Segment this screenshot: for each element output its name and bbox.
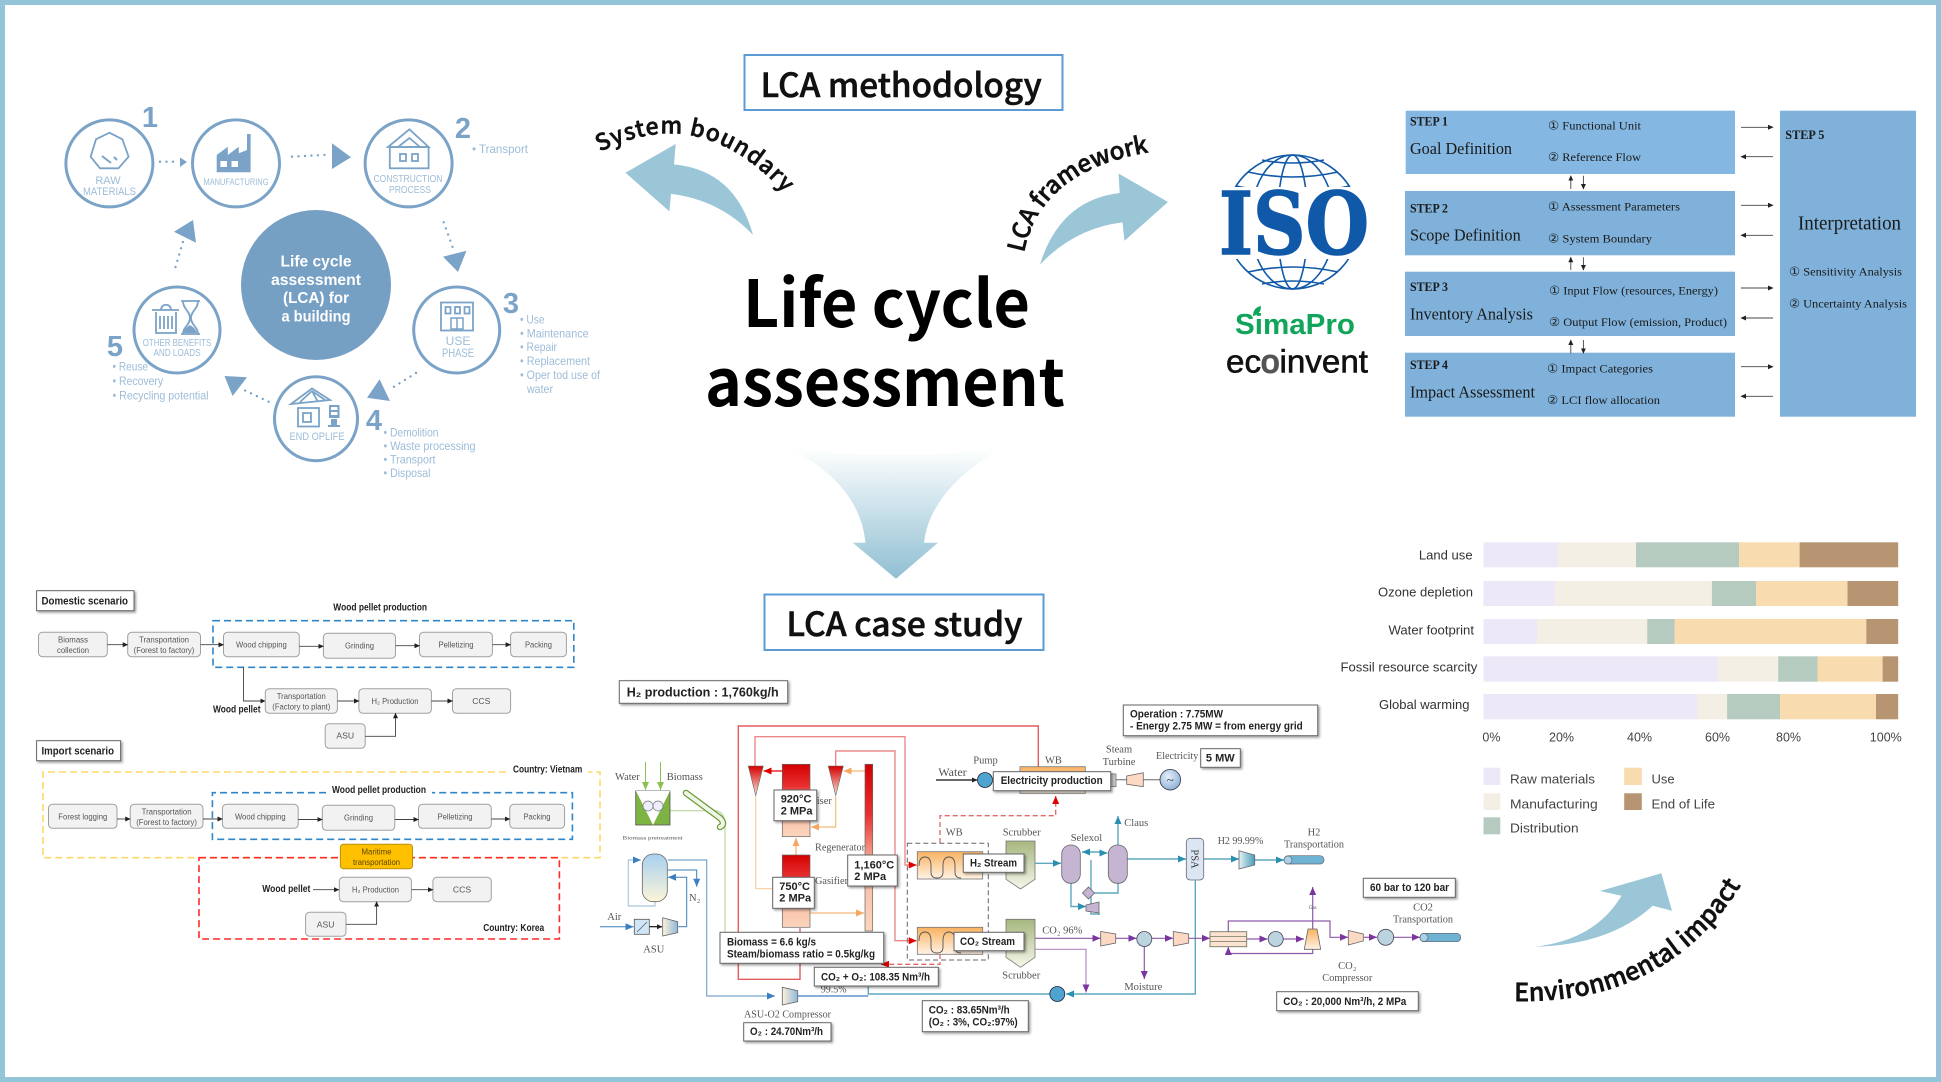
- domestic wood pellet production: [38, 603, 574, 667]
- callout: 1160 C: 1,160°C: [854, 859, 894, 871]
- import wood pellet production: Transportation: [142, 806, 192, 816]
- label: environmental impact: Environmental impact: [1516, 878, 1741, 1002]
- carbon dioxide compression line: Transportation: [1393, 915, 1454, 926]
- callout: CO2 flow: (O₂ : 3%, CO₂:97%): [929, 1017, 1018, 1029]
- step 1 goal definition: Goal Definition: [1410, 139, 1512, 158]
- red steam loops: [738, 726, 1038, 979]
- arrow: other benefits to raw materials: [174, 220, 196, 267]
- number 4 and notes: • Waste processing: [384, 439, 476, 453]
- icon: ISO globe and wordmark: ISO: [1219, 174, 1369, 275]
- step 5 interpretation: [1780, 111, 1916, 417]
- step 2 scope definition: ① Assessment Parameters: [1548, 200, 1680, 214]
- x axis ticks: 80%: [1776, 731, 1801, 745]
- carbon dioxide compression line: [1035, 887, 1461, 993]
- ecoinvent logo: ecoinvent: [1226, 344, 1368, 380]
- oxygen recycle line: [744, 880, 1195, 1021]
- domestic wood pellet production: Wood chipping: [236, 640, 287, 650]
- country Korea region: CCS: [453, 885, 471, 895]
- label: domestic scenario: Domestic scenario: [42, 595, 128, 607]
- callout: CO2 + O2: [814, 967, 938, 986]
- step 4 impact assessment: Impact Assessment: [1410, 382, 1535, 401]
- callout: 1160 C: 2 MPa: [854, 871, 887, 883]
- step 2 scope definition: Scope Definition: [1410, 226, 1521, 245]
- row: land use: [1419, 542, 1898, 567]
- biomass pretreatment: Biomass pretreatment: [623, 835, 683, 841]
- panel: scenario flow diagrams: [37, 591, 600, 939]
- arrow: raw materials to manufacturing: [160, 158, 187, 167]
- title: Life cycle assessment: [705, 252, 1065, 425]
- domestic hydrogen production chain: (Factory to plant): [272, 702, 330, 712]
- callout: 1160 C: [848, 855, 897, 886]
- country Korea region: Wood pellet: [262, 884, 311, 895]
- domestic wood pellet production: Packing: [525, 640, 552, 650]
- callout: operation power: - Energy 2.75 MW = from energy grid: [1130, 720, 1303, 732]
- step 1 goal definition: ① Functional Unit: [1548, 118, 1642, 132]
- hydrogen purification line: [1035, 816, 1345, 914]
- stage: raw materials: MATERIALS: [83, 186, 136, 198]
- electricity generation train: ~: [1167, 772, 1174, 787]
- heat exchangers and scrubbers: WB: [946, 828, 963, 839]
- legend: Raw materials: [1510, 771, 1596, 786]
- title: Life cycle assessment: Life cycle: [743, 252, 1030, 346]
- stage: use phase: [414, 287, 500, 373]
- panel: building life cycle diagram: [66, 102, 601, 480]
- row: ozone depletion: [1378, 581, 1898, 606]
- row: ozone depletion: Ozone depletion: [1378, 585, 1473, 600]
- number 1: 1: [142, 102, 158, 134]
- arrow: to environmental impact: [1535, 873, 1672, 947]
- arrow: use to end of life: [367, 373, 416, 401]
- row: land use: Land use: [1419, 547, 1473, 562]
- stage: construction process: PROCESS: [389, 185, 431, 196]
- title: Life cycle assessment: assessment: [705, 331, 1065, 425]
- centre circle: life cycle assessment for a building: Life cycle: [280, 254, 352, 270]
- domestic wood pellet production: Transportation: [139, 634, 189, 644]
- import wood pellet production: Forest logging: [58, 811, 107, 821]
- air separation unit: [600, 854, 775, 996]
- callout: electricity production: [993, 772, 1111, 791]
- step 4 impact assessment: [1405, 353, 1735, 417]
- callout: CO2 20000: CO₂ : 20,000 Nm³/h, 2 MPa: [1283, 996, 1407, 1008]
- icon: ISO globe and wordmark: [1219, 155, 1369, 289]
- legend: Manufacturing: [1510, 796, 1598, 811]
- number 2 and note: [455, 113, 529, 156]
- stage: use phase: PHASE: [442, 346, 474, 360]
- centre circle: life cycle assessment for a building: assessment: [271, 272, 362, 289]
- x axis ticks: 60%: [1705, 731, 1730, 745]
- step 1 goal definition: STEP 1: [1410, 114, 1448, 129]
- callout: 5 MW: 5 MW: [1206, 753, 1235, 765]
- air separation unit: N₂: [689, 893, 701, 904]
- hydrogen purification line: Claus: [1124, 818, 1148, 829]
- x axis ticks: 20%: [1549, 731, 1574, 745]
- step 2 scope definition: ② System Boundary: [1548, 232, 1652, 246]
- legend: Use: [1652, 771, 1675, 786]
- domestic wood pellet production: collection: [57, 645, 89, 655]
- panel: hydrogen process diagram: [600, 681, 1461, 1041]
- number 3 and notes: • Oper tod use of: [520, 368, 601, 382]
- domestic wood pellet production: (Forest to factory): [134, 645, 194, 655]
- stage: raw materials: [66, 120, 153, 207]
- number 3 and notes: water: [526, 382, 553, 396]
- label: LCA framework: LCA framework: [1006, 134, 1149, 251]
- country Korea region: H₂ Production: [352, 885, 399, 895]
- SimaPro logo: SimaPro: [1235, 309, 1355, 341]
- callout: H2 stream: [963, 854, 1024, 872]
- callout: biomass: Steam/biomass ratio = 0.5kg/kg: [727, 948, 875, 960]
- hydrogen purification line: PSA: [1188, 849, 1200, 869]
- label: import scenario: Import scenario: [42, 745, 114, 757]
- stage: raw materials: RAW: [95, 175, 121, 187]
- biomass pretreatment: [615, 762, 725, 933]
- carbon dioxide compression line: CO2: [1413, 903, 1433, 914]
- import wood pellet production: Pelletizing: [438, 811, 473, 821]
- callout: O2 flow: O₂ : 24.70Nm³/h: [750, 1026, 823, 1038]
- callout: 60 to 120 bar: 60 bar to 120 bar: [1370, 882, 1450, 894]
- number 4 and notes: • Disposal: [384, 466, 430, 480]
- number 3 and notes: 3: [503, 288, 519, 320]
- maritime transportation box: [340, 844, 412, 869]
- step 2 scope definition: [1405, 191, 1735, 255]
- heading: LCA methodology: LCA methodology: [761, 59, 1042, 107]
- callout: CO2 flow: [922, 1001, 1028, 1032]
- callout: 920 C: [774, 790, 817, 821]
- country Korea region: Country: Korea: [483, 923, 545, 934]
- number 5 and notes: 5: [107, 331, 123, 363]
- stage: end of life: END OPLIFE: [290, 431, 344, 443]
- callout: H2 production: H₂ production : 1,760kg/h: [627, 685, 779, 700]
- label: import scenario: [37, 741, 121, 761]
- country Korea region: [199, 858, 559, 939]
- step 4 impact assessment: ② LCI flow allocation: [1547, 393, 1660, 407]
- heat exchangers and scrubbers: Scrubber: [1002, 970, 1041, 981]
- import wood pellet production: Wood pellet production: [332, 785, 426, 796]
- domestic hydrogen production chain: Transportation: [277, 691, 326, 701]
- arrows between steps: [1571, 127, 1773, 396]
- legend: End of Life: [1652, 796, 1715, 811]
- number 2 and note: 2: [455, 113, 471, 145]
- step 3 inventory analysis: [1405, 272, 1735, 336]
- logos: ISO, SimaPro, ecoinvent: [1219, 155, 1369, 380]
- callout: biomass: Biomass = 6.6 kg/s: [727, 936, 816, 948]
- electricity generation train: Water: [938, 765, 967, 779]
- step 5 interpretation: ① Sensitivity Analysis: [1789, 265, 1902, 279]
- label: domestic scenario: [37, 591, 134, 611]
- callout: CO2 + O2: CO₂ + O₂: 108.35 Nm³/h: [821, 971, 930, 983]
- riser, gasifier and regenerator columns: Regenerator: [815, 843, 865, 854]
- maritime transportation box: Maritime: [362, 846, 392, 856]
- number 5 and notes: • Recycling potential: [112, 388, 208, 402]
- biomass pretreatment: Biomass: [667, 772, 703, 783]
- centre circle: life cycle assessment for a building: [241, 210, 391, 360]
- row: water footprint: Water footprint: [1388, 622, 1474, 637]
- legend: Distribution: [1510, 821, 1579, 836]
- step 1 goal definition: [1406, 111, 1735, 174]
- step 2 scope definition: STEP 2: [1410, 201, 1448, 216]
- hydrogen purification line: H2: [1308, 828, 1320, 839]
- air separation unit: Air: [607, 912, 622, 923]
- label: system boundary: System boundary: [596, 117, 794, 192]
- callout: operation power: Operation : 7.75MW: [1130, 708, 1224, 720]
- heading: LCA case study: LCA case study: [786, 598, 1022, 646]
- step 5 interpretation: ② Uncertainty Analysis: [1789, 296, 1907, 310]
- country Vietnam region: Country: Vietnam: [513, 765, 582, 776]
- electricity generation train: WB: [1045, 755, 1062, 766]
- domestic wood pellet production: Pelletizing: [438, 640, 474, 650]
- air separation unit: ASU: [643, 944, 665, 955]
- callout: CO2 20000: [1277, 992, 1418, 1011]
- domestic hydrogen production chain: ASU: [336, 730, 354, 740]
- arrow: to LCA framework: [1040, 174, 1168, 264]
- carbon dioxide compression line: Compressor: [1322, 973, 1373, 984]
- row: global warming: [1379, 694, 1898, 719]
- callout: O2 flow: [744, 1023, 831, 1041]
- hydrogen purification line: Selexol: [1071, 833, 1102, 844]
- callout: H2 stream: H₂ Stream: [970, 858, 1017, 870]
- riser, gasifier and regenerator columns: Gasifier: [815, 876, 848, 887]
- stage: end of life: [274, 377, 358, 461]
- step 3 inventory analysis: ② Output Flow (emission, Product): [1549, 315, 1727, 329]
- callout: CO2 stream: [954, 932, 1024, 951]
- callout: CO2 flow: CO₂ : 83.65Nm³/h: [929, 1004, 1010, 1016]
- step 5 interpretation: STEP 5: [1785, 127, 1825, 142]
- number 5 and notes: • Recovery: [112, 374, 163, 388]
- electricity generation train: Pump: [973, 755, 998, 766]
- electricity generation train: Steam: [1106, 745, 1132, 756]
- oxygen recycle line: ASU-O2 Compressor: [744, 1010, 831, 1021]
- callout: CO2 stream: CO₂ Stream: [960, 936, 1015, 948]
- carbon dioxide compression line: CO₂: [1338, 961, 1357, 972]
- step 3 inventory analysis: Inventory Analysis: [1410, 304, 1533, 323]
- carbon dioxide compression line: Moisture: [1124, 982, 1163, 993]
- legend: [1484, 768, 1715, 836]
- import wood pellet production: Packing: [524, 811, 551, 821]
- stage: manufacturing: [192, 120, 280, 207]
- number 5 and notes: • Reuse: [112, 360, 148, 374]
- callout: 750 C: 750°C: [779, 881, 810, 893]
- electricity generation train: Turbine: [1103, 757, 1136, 768]
- step 5 interpretation: Interpretation: [1798, 212, 1901, 234]
- number 4 and notes: • Transport: [384, 452, 436, 466]
- domestic hydrogen production chain: [213, 667, 511, 748]
- stage: manufacturing: MANUFACTURING: [204, 177, 268, 188]
- electricity generation train: [936, 745, 1199, 793]
- carbon dioxide compression line: CO₂ 96%: [1042, 925, 1083, 936]
- x axis ticks: [1482, 731, 1902, 745]
- number 2 and note: • Transport: [472, 142, 529, 156]
- arrow: down to case study: [790, 448, 1001, 579]
- step 4 impact assessment: ① Impact Categories: [1547, 362, 1653, 376]
- stage: other benefits and loads: OTHER BENEFITS: [143, 338, 212, 349]
- callout: biomass: [720, 932, 884, 963]
- step 3 inventory analysis: STEP 3: [1410, 279, 1448, 294]
- riser, gasifier and regenerator columns: [748, 764, 873, 931]
- panel: LCA framework steps: [1405, 111, 1916, 417]
- callout: 920 C: 2 MPa: [781, 805, 813, 817]
- stage: other benefits and loads: AND LOADS: [154, 348, 201, 359]
- number 3 and notes: • Maintenance: [520, 326, 589, 340]
- stage: construction process: [365, 120, 452, 207]
- row: water footprint: [1388, 619, 1898, 644]
- x axis ticks: 100%: [1870, 731, 1902, 745]
- callout: 920 C: 920°C: [781, 794, 811, 806]
- domestic hydrogen production chain: CCS: [472, 696, 491, 706]
- callouts with process values: [619, 681, 1455, 1041]
- domestic wood pellet production: Grinding: [345, 641, 374, 651]
- stage: construction process: CONSTRUCTION: [374, 174, 442, 185]
- callout: 60 to 120 bar: [1363, 878, 1455, 897]
- biomass pretreatment: Water: [615, 772, 640, 783]
- arrow: construction to use: [443, 222, 466, 272]
- callout: 5 MW: [1201, 749, 1240, 767]
- number 5 and notes: [107, 331, 208, 402]
- row: fossil resource scarcity: Fossil resource scarcity: [1340, 660, 1478, 675]
- domestic hydrogen production chain: H₂ Production: [372, 696, 419, 706]
- centre circle: life cycle assessment for a building: a building: [282, 308, 350, 326]
- import wood pellet production: (Forest to factory): [136, 817, 197, 827]
- number 3 and notes: [503, 288, 601, 396]
- arrow: manufacturing to construction: [292, 143, 351, 169]
- country Korea region: ASU: [317, 919, 334, 929]
- callout: electricity production: Electricity production: [1001, 775, 1103, 787]
- maritime transportation box: transportation: [353, 857, 400, 867]
- riser, gasifier and regenerator columns: iser: [817, 796, 832, 807]
- panel: environmental impact stacked bar chart: [1340, 542, 1902, 836]
- electricity generation train: Electricity: [1156, 751, 1199, 762]
- step 3 inventory analysis: ① Input Flow (resources, Energy): [1549, 283, 1718, 297]
- domestic wood pellet production: Wood pellet production: [333, 603, 427, 614]
- carbon dioxide compression line: Gas: [1309, 906, 1317, 911]
- country Vietnam region: [43, 765, 600, 858]
- heat exchangers and scrubbers: Scrubber: [1003, 828, 1041, 839]
- centre circle: life cycle assessment for a building: (LCA) for: [283, 290, 349, 307]
- callout: H2 production: [619, 681, 788, 703]
- step 4 impact assessment: STEP 4: [1410, 357, 1448, 372]
- domestic hydrogen production chain: Wood pellet: [213, 705, 261, 716]
- number 4 and notes: [366, 405, 476, 480]
- step 1 goal definition: ② Reference Flow: [1548, 150, 1641, 164]
- stage: other benefits and loads: [134, 287, 220, 373]
- number 3 and notes: • Use: [520, 312, 545, 326]
- callout: operation power: [1123, 705, 1318, 736]
- import wood pellet production: Grinding: [344, 813, 373, 823]
- domestic wood pellet production: Biomass: [58, 634, 88, 644]
- arrow: end of life to other benefits: [224, 376, 269, 402]
- row: global warming: Global warming: [1379, 697, 1470, 712]
- stage: use phase: USE: [446, 334, 470, 348]
- arrow: to system boundary: [626, 144, 753, 235]
- hydrogen purification line: H2 99.99%: [1218, 836, 1264, 847]
- import wood pellet production: Wood chipping: [235, 812, 286, 822]
- heat exchangers and scrubbers: [881, 796, 1056, 981]
- x axis ticks: 0%: [1482, 731, 1500, 745]
- callout: 750 C: 2 MPa: [779, 893, 812, 905]
- number 4 and notes: 4: [366, 405, 382, 437]
- number 3 and notes: • Repair: [520, 340, 557, 354]
- x axis ticks: 40%: [1627, 731, 1652, 745]
- callout: 750 C: [773, 877, 814, 908]
- row: fossil resource scarcity: [1340, 656, 1898, 682]
- number 3 and notes: • Replacement: [520, 354, 591, 368]
- number 4 and notes: • Demolition: [384, 426, 438, 440]
- hydrogen purification line: Transportation: [1284, 840, 1345, 851]
- oxygen recycle line: 99.5%: [821, 984, 847, 995]
- import wood pellet production: [48, 785, 572, 839]
